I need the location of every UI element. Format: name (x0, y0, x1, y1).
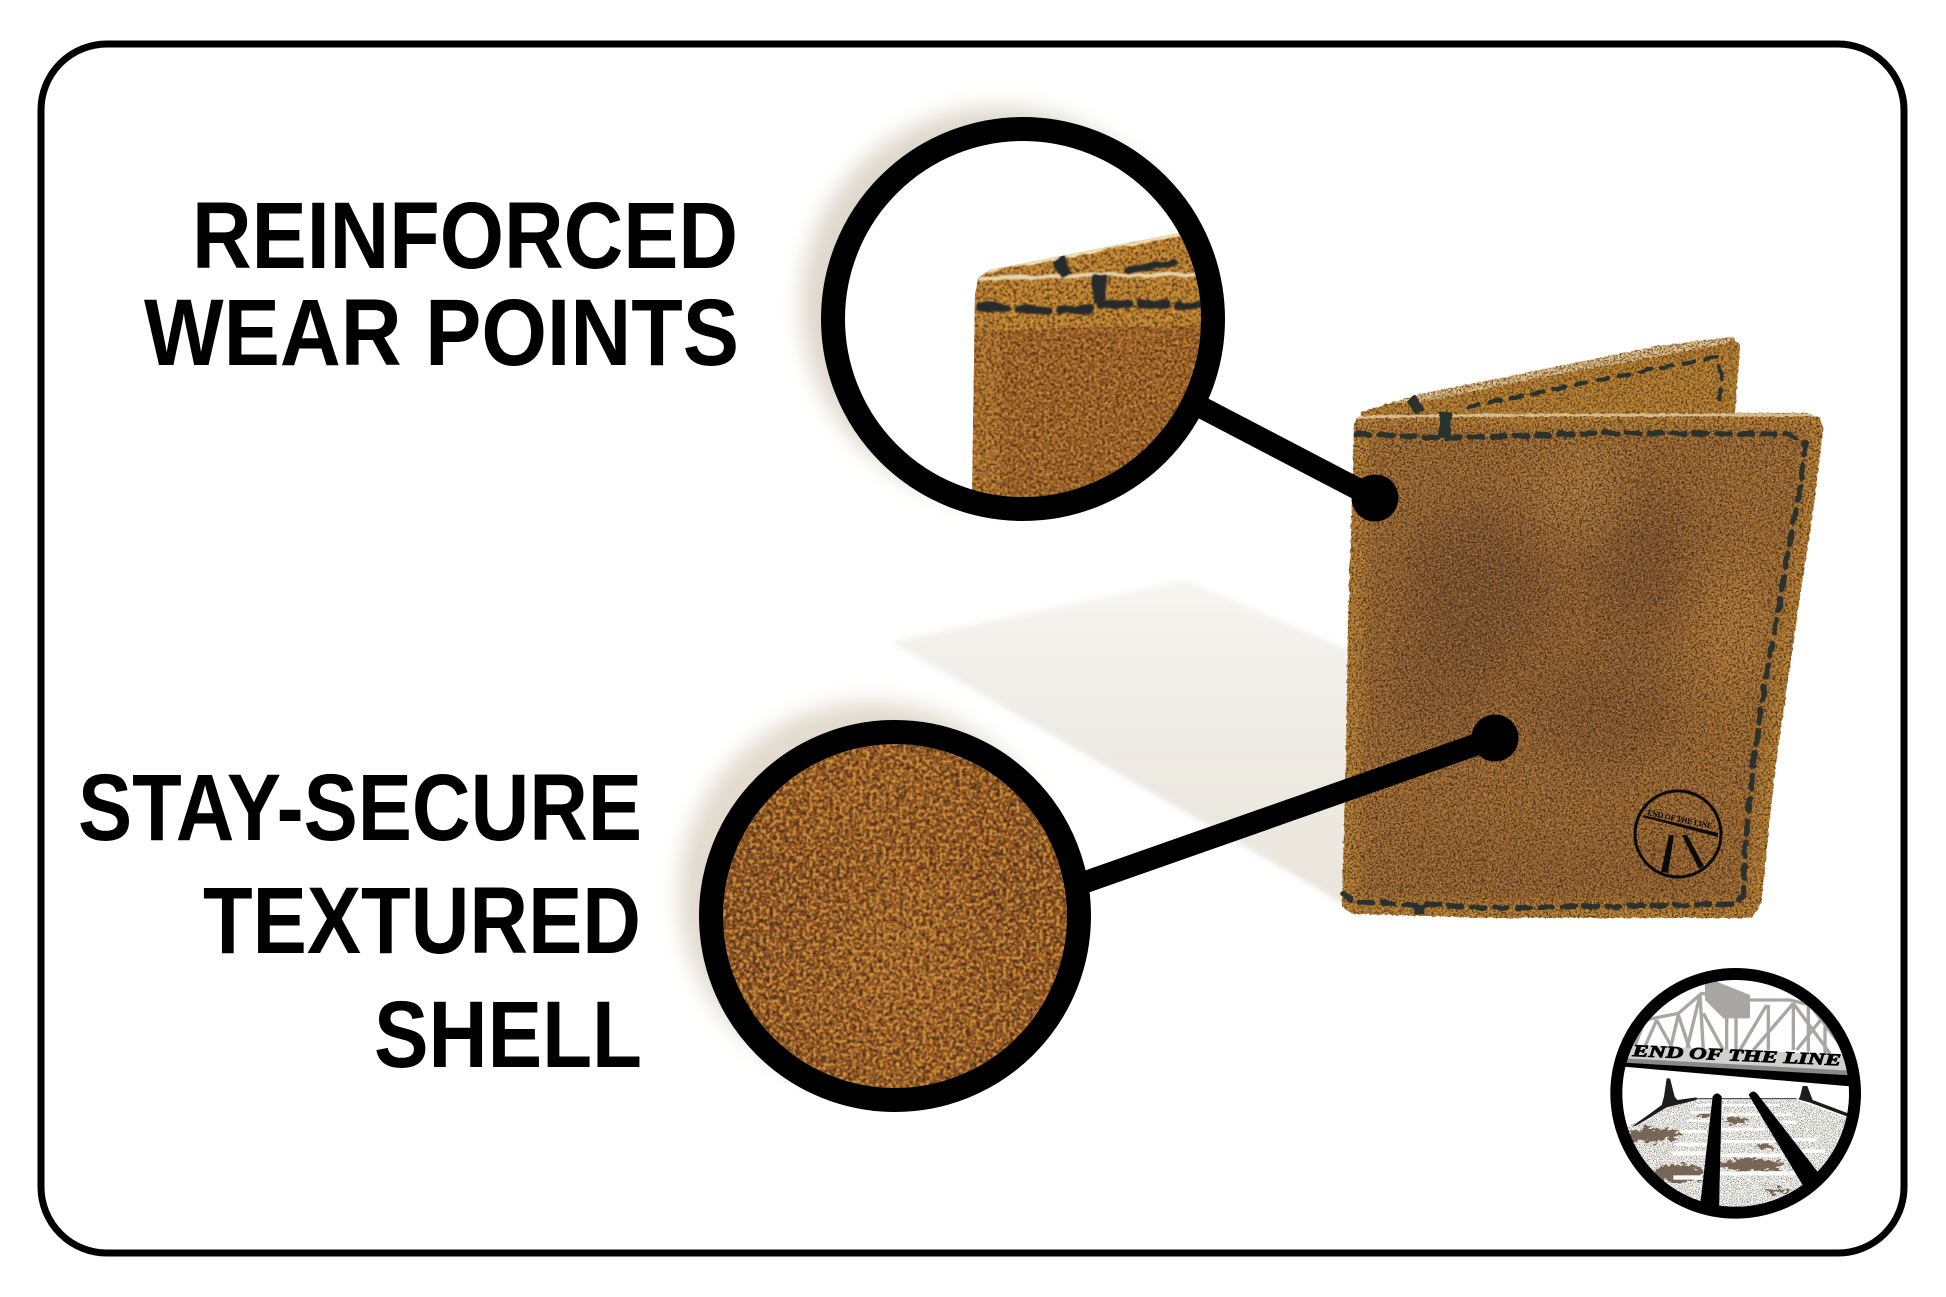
callout ring (833, 129, 1213, 509)
heading: stay-secure textured shell (78, 755, 642, 1088)
wallet back panel (1360, 336, 1740, 417)
logo ground and tracks (1627, 1078, 1848, 1207)
logo rails (1700, 1092, 1819, 1210)
wallet brand mark (1635, 791, 1721, 877)
wallet photo (1335, 330, 1830, 925)
callout shadow (679, 702, 1063, 1086)
callout: reinforced wear points zoom (801, 107, 1398, 522)
connector line to shell surface (1060, 738, 1495, 891)
brand logo: End of the Line (1616, 974, 1857, 1220)
magnified wallet corner (972, 233, 1201, 497)
heading: reinforced wear points (144, 183, 739, 386)
magnified leather texture (715, 735, 1075, 1095)
heading: stay-secure textured shell: SHELL (374, 982, 642, 1088)
logo text: END OF THE LINE (1631, 1041, 1841, 1069)
heading: reinforced wear points: WEAR POINTS (144, 280, 739, 386)
logo bridge illustration (1625, 982, 1850, 1077)
connector dot (1352, 474, 1398, 522)
wallet front panel (1335, 405, 1830, 925)
logo horizon and signal towers (1632, 1078, 1850, 1127)
wallet brand mark: END OF THE LINE (1647, 808, 1713, 831)
wallet stitching (1343, 357, 1805, 915)
cast shadow of wallet (891, 580, 1360, 915)
logo ring (1616, 974, 1855, 1213)
logo divider bar (1623, 1063, 1853, 1087)
callout shadow (801, 107, 1197, 503)
callout: textured shell zoom (679, 702, 1518, 1100)
heading: stay-secure textured shell: TEXTURED (203, 868, 641, 974)
callout ring (711, 732, 1079, 1100)
heading: stay-secure textured shell: STAY-SECURE (78, 755, 642, 861)
connector line to wear point (1170, 391, 1375, 498)
connector dot (1472, 714, 1518, 762)
heading: reinforced wear points: REINFORCED (192, 183, 738, 289)
